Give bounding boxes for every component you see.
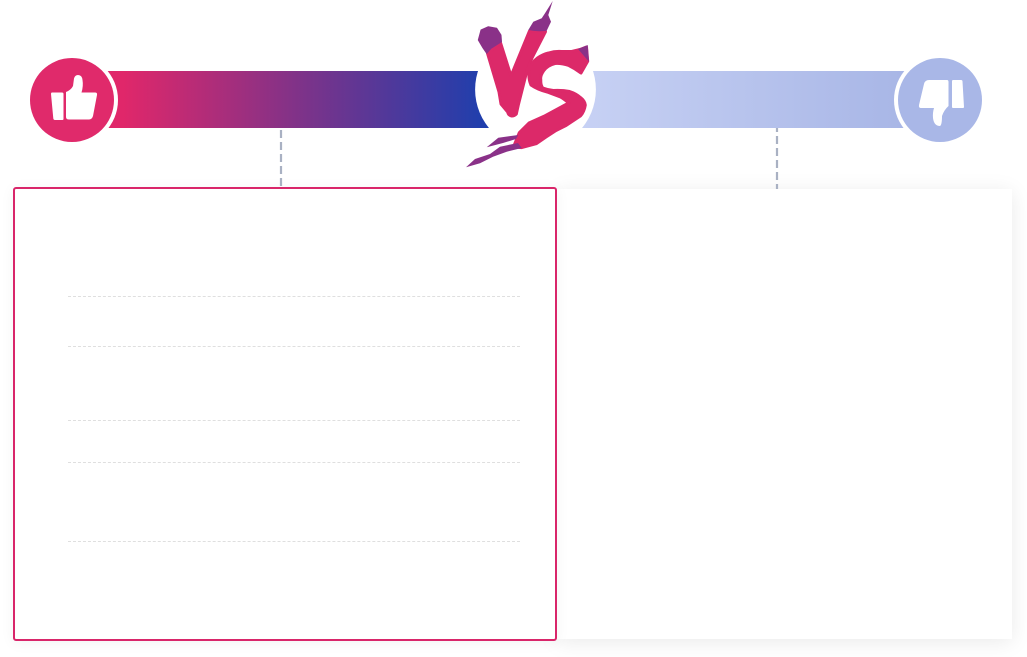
row divider 3 xyxy=(68,420,520,421)
icon: thumbs down xyxy=(894,54,986,146)
connector: left dashed line xyxy=(280,130,282,187)
S top purple tip xyxy=(578,45,589,62)
V top-left purple blob xyxy=(478,27,502,53)
panel: right comparison card xyxy=(557,189,1012,639)
V top-right purple brush tips xyxy=(528,1,553,31)
letter S xyxy=(514,47,588,148)
VS emblem xyxy=(466,1,589,167)
bar: right gradient xyxy=(570,71,910,128)
row divider 2 xyxy=(68,346,520,347)
row divider 1 xyxy=(68,296,520,297)
letter V xyxy=(488,31,546,116)
bar: left gradient xyxy=(100,71,500,128)
S lower brush strands xyxy=(466,135,522,167)
VS white backing circle xyxy=(475,29,596,150)
connector: right dashed line xyxy=(776,124,778,189)
row divider 5 xyxy=(68,541,520,542)
panel: left comparison card xyxy=(13,187,557,641)
row divider 4 xyxy=(68,462,520,463)
icon: thumbs up xyxy=(26,54,118,146)
